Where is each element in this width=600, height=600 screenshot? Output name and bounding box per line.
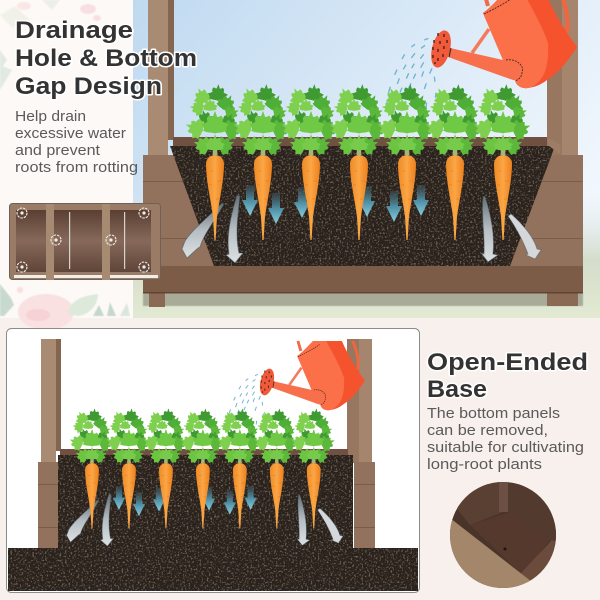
right post [347, 339, 372, 463]
panel: top scene background [0, 0, 600, 318]
back rim [60, 449, 348, 455]
icons: drainage hole markers [17, 208, 149, 272]
back rim [173, 137, 547, 147]
heading: open-ended base: Base [427, 376, 487, 403]
left pedestal [38, 462, 58, 548]
inset: planter underside with drainage holes [10, 204, 160, 280]
text: base description: long-root plants [427, 456, 542, 473]
corner bracket [549, 146, 555, 150]
left leg [149, 293, 165, 307]
text: base description: can be removed, [427, 422, 548, 439]
text: drainage description: and prevent [15, 142, 101, 159]
text: drainage description: roots from rotting [15, 159, 138, 176]
background: lower section [0, 318, 600, 600]
right pedestal [354, 462, 375, 548]
carrots and arrows [182, 84, 541, 263]
carrots and arrows [67, 408, 343, 546]
heading: drainage: Gap Design [15, 73, 162, 100]
illustration: top raised planter [143, 0, 583, 307]
text: base description [427, 405, 584, 473]
text: drainage description [15, 108, 138, 176]
planter shadow [143, 293, 583, 306]
text: base description: The bottom panels [427, 405, 560, 422]
heading: open-ended base [427, 349, 588, 403]
soil [170, 146, 555, 266]
planter front wood [143, 155, 583, 294]
soil in ground [7, 455, 419, 592]
decoration: floral top left [0, 0, 101, 90]
water droplets and can [227, 341, 365, 424]
water droplets [386, 38, 436, 108]
photo: planter interior circle [450, 482, 556, 590]
heading: drainage: Drainage [15, 17, 133, 44]
text: drainage description: excessive water [15, 125, 126, 142]
panel: open-ended base illustration [6, 328, 420, 592]
heading: open-ended base: Open-Ended [427, 349, 588, 376]
right leg [547, 293, 578, 306]
left post [148, 0, 174, 155]
text: base description: suitable for cultivating [427, 439, 584, 456]
heading: drainage: Hole & Bottom [15, 45, 197, 72]
right post [547, 0, 578, 155]
watering can [428, 0, 577, 88]
heading: drainage [15, 17, 197, 100]
text: drainage description: Help drain [15, 108, 86, 125]
left post [41, 339, 61, 463]
decoration: floral bottom left [0, 284, 130, 330]
